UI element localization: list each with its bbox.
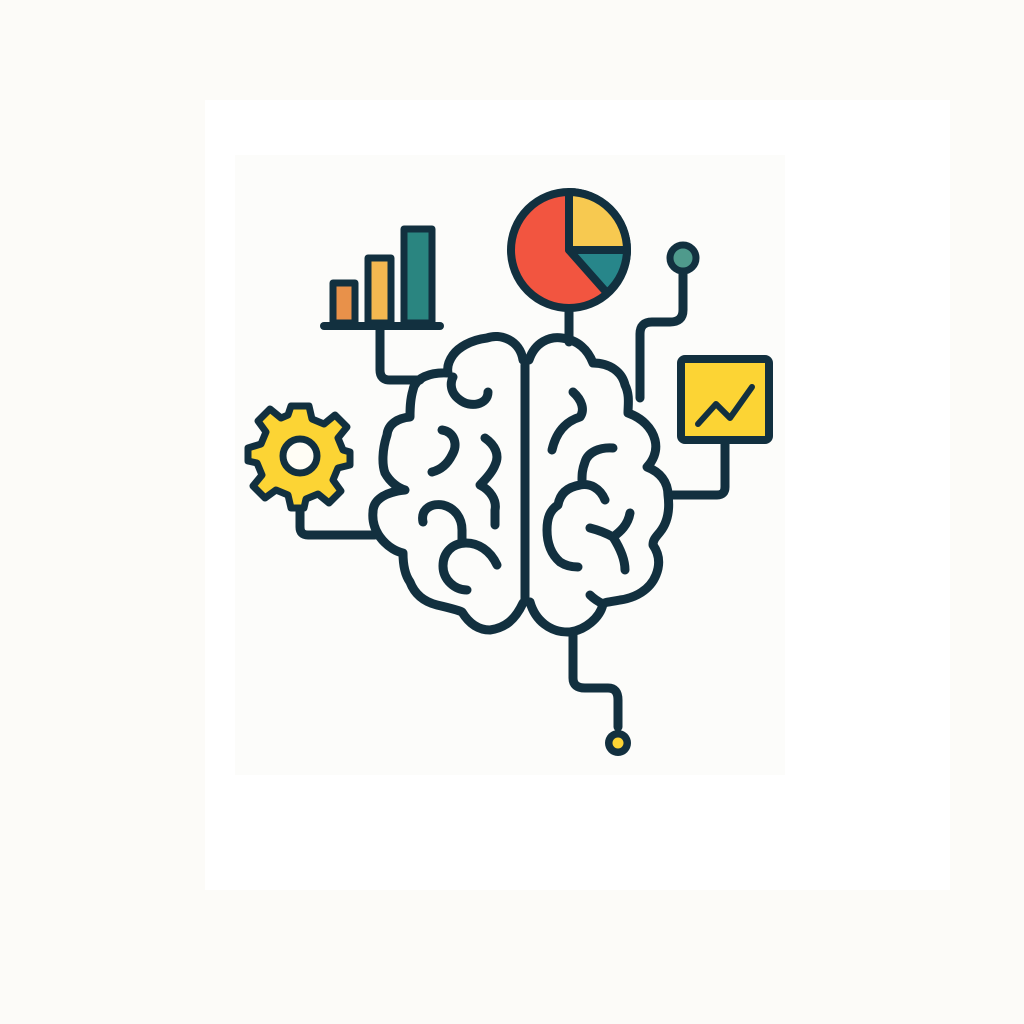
dot: top right [670,245,696,271]
dot: bottom [605,730,631,756]
gear [248,406,350,508]
connectors [300,272,725,727]
brain [373,336,669,632]
pie chart [511,192,627,308]
bar chart [324,229,440,326]
line chart box [681,359,769,440]
